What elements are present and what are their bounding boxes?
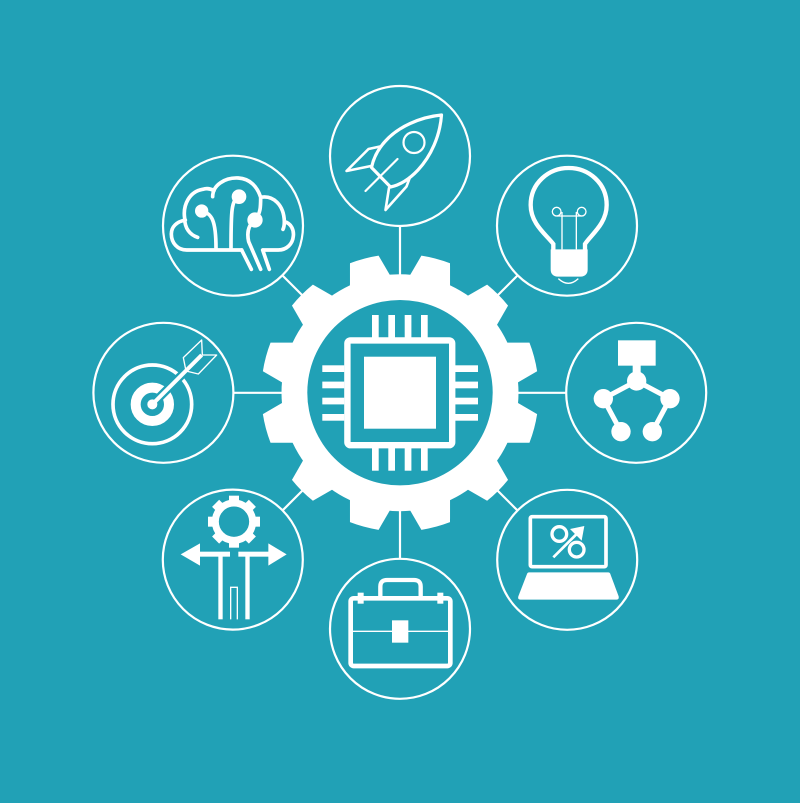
panel: target <box>93 323 233 463</box>
panel: brain <box>163 156 303 296</box>
panel: light bulb <box>497 156 637 296</box>
icon: network diagram <box>594 340 680 441</box>
icon: rocket <box>346 115 442 210</box>
panel: network <box>566 323 706 463</box>
gear inner hole <box>307 300 493 485</box>
brain circle <box>163 156 303 296</box>
target circle <box>93 323 233 463</box>
panel: rocket <box>330 86 470 226</box>
icon: target and arrow <box>113 340 217 444</box>
chip frame <box>347 340 452 445</box>
laptop circle <box>497 490 637 630</box>
panel: briefcase <box>330 559 470 699</box>
panel: direction choice <box>163 490 303 630</box>
icon: light bulb <box>531 168 607 283</box>
chip pins <box>322 315 478 471</box>
bulb circle <box>497 156 637 296</box>
icon: circuit brain <box>171 178 293 269</box>
network circle <box>566 323 706 463</box>
icon: laptop with percent growth <box>518 517 619 600</box>
central gear <box>261 253 539 532</box>
chip core <box>364 357 436 429</box>
panel: laptop <box>497 490 637 630</box>
rocket circle <box>330 86 470 226</box>
icon: briefcase <box>351 580 450 666</box>
gear body <box>282 274 518 511</box>
icon: gear with diverging arrows <box>181 496 287 619</box>
briefcase circle <box>330 559 470 699</box>
connector lines <box>234 226 566 559</box>
gear teeth <box>261 253 539 532</box>
icon: microchip <box>322 315 478 471</box>
direction circle <box>163 490 303 630</box>
